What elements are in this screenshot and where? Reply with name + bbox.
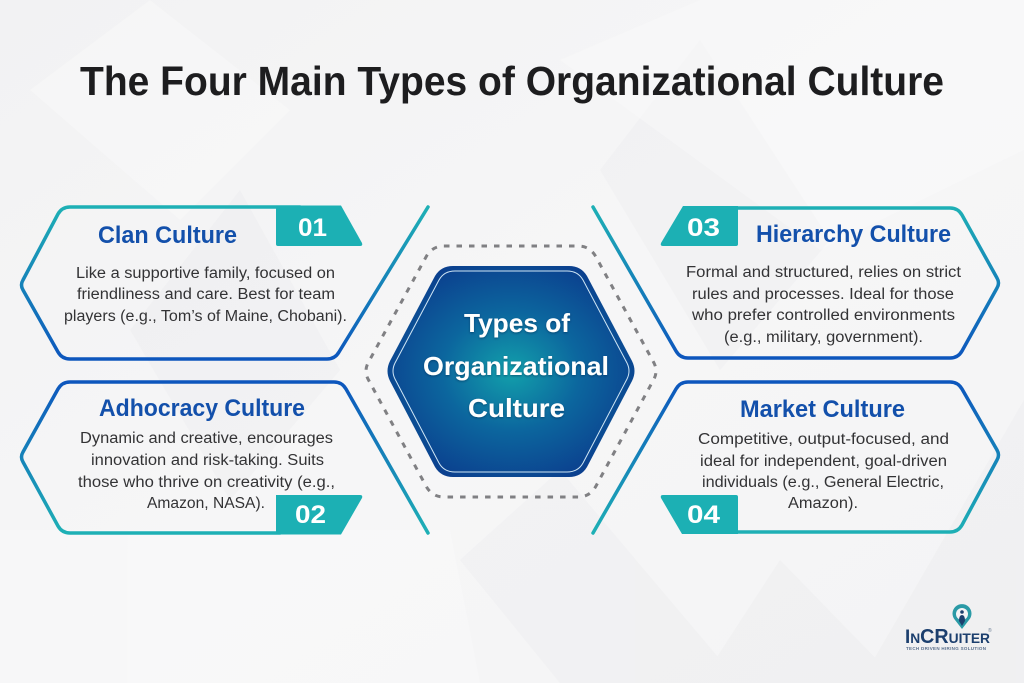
description: Like a supportive family, focused on <box>76 265 335 282</box>
number tab 01 <box>276 206 362 246</box>
logo: InCruiter <box>905 604 992 651</box>
panel: clan culture <box>22 206 428 359</box>
hexagon label: Culture <box>468 393 565 423</box>
panel outline <box>22 207 428 359</box>
description: Amazon, NASA). <box>147 495 265 512</box>
description: players (e.g., Tom’s of Maine, Chobani). <box>64 308 347 325</box>
panel: hierarchy culture <box>593 206 998 358</box>
number tab 03 <box>661 206 738 246</box>
heading: Hierarchy Culture <box>756 221 951 248</box>
heading: Adhocracy Culture <box>99 395 305 422</box>
dashed ring <box>366 246 656 497</box>
number tab 04 <box>661 495 738 534</box>
panel outline <box>593 382 998 533</box>
heading: Market Culture <box>740 396 905 423</box>
panel: adhocracy culture <box>22 382 428 534</box>
hexagon label <box>423 308 609 423</box>
hexagon fill <box>388 266 634 477</box>
description: ideal for independent, goal-driven <box>700 453 947 470</box>
logo registered mark: ® <box>988 627 992 634</box>
panel: market culture <box>593 382 998 534</box>
number tab 03: 03 <box>687 214 720 242</box>
description <box>78 430 335 512</box>
description: Competitive, output-focused, and <box>698 431 949 448</box>
description: individuals (e.g., General Electric, <box>702 474 944 491</box>
description: rules and processes. Ideal for those <box>692 286 954 303</box>
description: Dynamic and creative, encourages <box>80 430 333 447</box>
description: innovation and risk-taking. Suits <box>91 452 324 469</box>
description <box>64 265 347 325</box>
hexagon label: Types of <box>464 308 570 338</box>
panel outline <box>22 382 428 533</box>
logo wordmark: INCRUITER <box>905 626 990 648</box>
description: friendliness and care. Best for team <box>77 286 335 303</box>
number tab 02 <box>276 495 362 534</box>
number tab 01: 01 <box>298 214 327 242</box>
description: Formal and structured, relies on strict <box>686 264 962 281</box>
description: those who thrive on creativity (e.g., <box>78 474 335 491</box>
description: who prefer controlled environments <box>691 307 955 324</box>
heading: Clan Culture <box>98 222 237 249</box>
description: Amazon). <box>788 495 858 512</box>
description <box>698 431 949 512</box>
number tab 02: 02 <box>295 501 326 529</box>
description: (e.g., military, government). <box>724 329 923 346</box>
logo tagline: TECH DRIVEN HIRING SOLUTION <box>906 646 986 651</box>
center hexagon <box>366 246 656 497</box>
panel outline <box>593 207 998 358</box>
icon: location pin <box>952 604 972 629</box>
hexagon label: Organizational <box>423 351 609 381</box>
number tab 04: 04 <box>687 501 720 529</box>
title: The Four Main Types of Organizational Culture <box>80 58 944 104</box>
description <box>686 264 962 346</box>
hexagon inner line <box>393 271 629 472</box>
